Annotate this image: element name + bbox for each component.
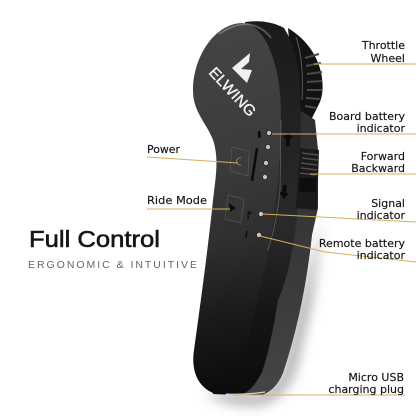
throttle wheel	[288, 28, 323, 118]
LED dots	[256, 130, 272, 238]
label: remote battery indicator	[319, 237, 405, 262]
label: forward backward	[351, 150, 405, 175]
label: remote battery indicator: indicator	[357, 249, 405, 262]
signal glyph and battery glyph	[246, 211, 252, 238]
board battery glyph	[258, 131, 260, 138]
down arrow	[279, 185, 289, 199]
power button	[230, 147, 249, 176]
remote control	[193, 21, 323, 395]
title: Full Control	[29, 226, 160, 252]
indicator slot	[252, 148, 257, 181]
logo	[205, 53, 259, 120]
label: micro usb: Micro USB	[348, 371, 404, 384]
line: ride mode	[147, 208, 230, 210]
face top highlight	[219, 24, 271, 38]
label: throttle wheel	[361, 39, 405, 65]
label: forward backward: Forward	[361, 150, 405, 163]
label: throttle wheel: Throttle	[361, 39, 405, 52]
label: board battery indicator: Board battery	[329, 110, 405, 123]
label: board battery indicator	[329, 110, 405, 135]
label: board battery indicator: indicator	[357, 122, 405, 135]
label: ride mode: Ride Mode	[147, 194, 207, 207]
label: signal indicator: indicator	[357, 209, 405, 222]
line: signal	[263, 214, 416, 222]
remote side body	[213, 105, 318, 395]
line: throttle wheel	[314, 63, 416, 65]
line: micro usb	[233, 394, 405, 396]
brand name: ELWING	[205, 64, 259, 120]
front face	[193, 23, 281, 393]
ride mode button	[225, 195, 244, 223]
label: remote battery indicator: Remote battery	[319, 237, 405, 250]
edge line	[268, 120, 281, 250]
label: signal indicator	[357, 197, 405, 222]
label: forward backward: Backward	[351, 162, 405, 175]
line: remote battery	[260, 236, 416, 262]
label: throttle wheel: Wheel	[371, 52, 405, 65]
label: micro usb: charging plug	[328, 383, 404, 396]
line: board battery	[272, 133, 416, 135]
label: power: Power	[147, 143, 180, 156]
callout lines	[147, 64, 416, 395]
dark middle band	[213, 21, 301, 395]
line: forward backward	[310, 173, 416, 175]
subtitle: ERGONOMIC & INTUITIVE	[28, 259, 197, 271]
forward backward switch	[296, 148, 319, 210]
label: micro usb	[328, 371, 404, 396]
label: signal indicator: Signal	[371, 197, 405, 210]
up arrow	[283, 132, 293, 146]
bottom highlight	[226, 392, 265, 394]
remote shadow	[205, 220, 322, 405]
line: power	[147, 157, 238, 163]
